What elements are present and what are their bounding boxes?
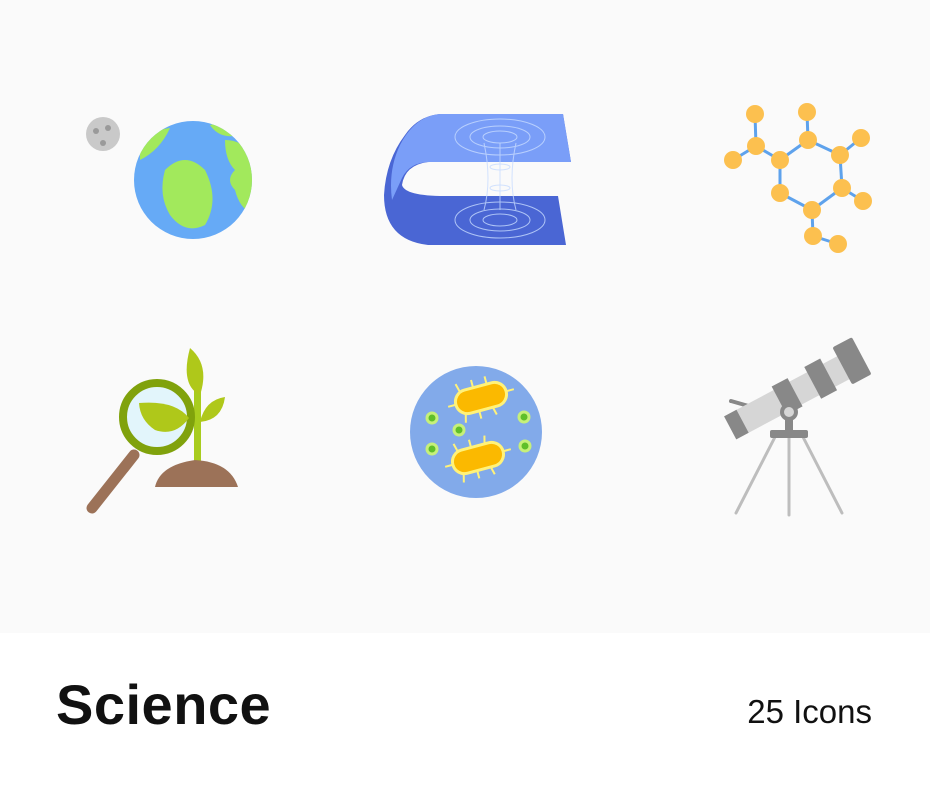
icon: wormhole — [384, 114, 571, 245]
icon: earth and moon — [86, 117, 255, 239]
icon: bacteria — [410, 366, 542, 498]
icon: molecule — [724, 103, 872, 253]
text: icon count: 25 Icons — [747, 693, 872, 730]
icon: plant under magnifier — [92, 348, 238, 508]
icon: telescope — [719, 337, 872, 515]
title: Science — [56, 673, 271, 736]
